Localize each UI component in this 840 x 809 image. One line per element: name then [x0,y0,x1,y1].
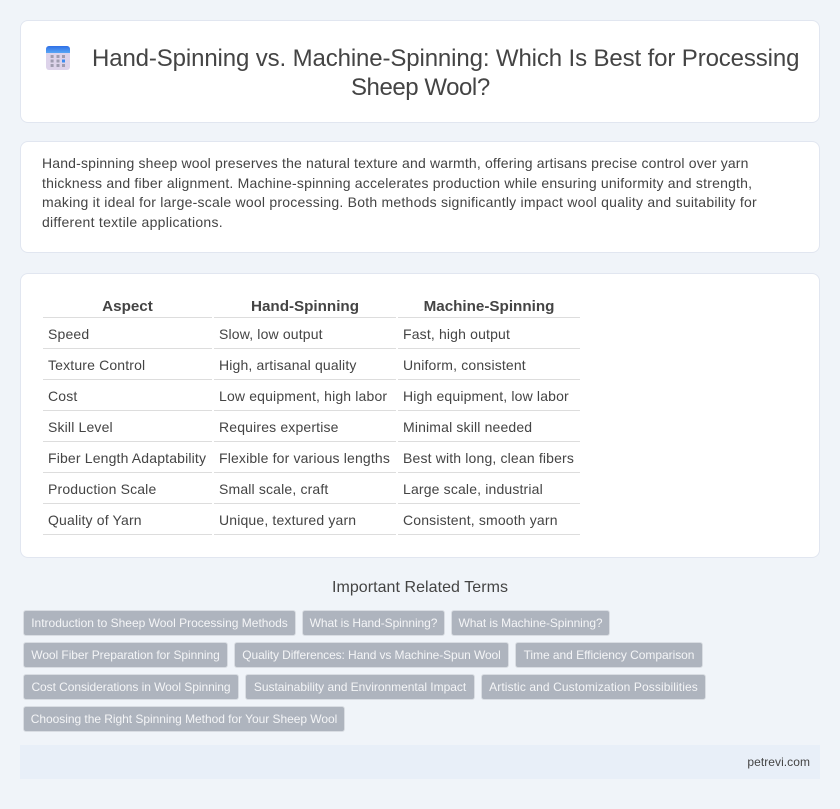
comparison table: Quality of Yarn [48,512,142,528]
tag: Time and Efficiency Comparison [524,648,694,662]
tag: What is Machine-Spinning? [458,616,603,630]
comparison table: Slow, low output [219,326,323,342]
tag [23,642,228,668]
comparison table: Fast, high output [403,326,510,342]
title [92,45,799,101]
icon: calendar grid [46,46,70,70]
tag [245,674,475,700]
tag [451,610,610,636]
tag [481,674,706,700]
tag: What is Hand-Spinning? [310,616,437,630]
comparison table: Flexible for various lengths [219,450,390,466]
tag [23,706,345,732]
comparison table [43,298,580,535]
intro text: Hand-spinning sheep wool preserves the natural texture and warmth, offering artisans precise control over yarn [42,155,749,171]
comparison table: Low equipment, high labor [219,388,387,404]
title: Sheep Wool? [351,74,490,101]
tag: Sustainability and Environmental Impact [254,680,466,694]
comparison table: High equipment, low labor [403,388,569,404]
panel: title card [20,20,820,123]
comparison table: Texture Control [48,357,145,373]
tag: Wool Fiber Preparation for Spinning [31,648,220,662]
comparison table: Cost [48,388,77,404]
comparison table: Requires expertise [219,419,339,435]
comparison table: Skill Level [48,419,113,435]
comparison table: Minimal skill needed [403,419,532,435]
tag: Introduction to Sheep Wool Processing Methods [31,616,288,630]
tag: Artistic and Customization Possibilities [489,680,698,694]
heading: related terms: Important Related Terms [332,579,508,596]
intro text: different textile applications. [42,214,223,230]
intro text [42,155,757,230]
comparison table: Consistent, smooth yarn [403,512,558,528]
comparison table: Unique, textured yarn [219,512,356,528]
tag [23,610,296,636]
footer: petrevi.com [747,755,810,769]
panel: comparison table [20,273,820,558]
tag [234,642,509,668]
comparison table: Fiber Length Adaptability [48,450,206,466]
tag: Cost Considerations in Wool Spinning [31,680,231,694]
comparison table: Uniform, consistent [403,357,526,373]
tag: Choosing the Right Spinning Method for Your Sheep Wool [31,712,337,726]
related term tags [23,610,706,732]
intro text: making it ideal for large-scale wool processing. Both methods significantly impact wool quality and suitability for [42,194,757,210]
comparison table: Best with long, clean fibers [403,450,574,466]
comparison table: High, artisanal quality [219,357,357,373]
comparison table: Large scale, industrial [403,481,543,497]
panel: introduction [20,141,820,253]
comparison table: Machine-Spinning [424,298,554,315]
comparison table: Production Scale [48,481,156,497]
tag [302,610,445,636]
tag [23,674,239,700]
tag [515,642,703,668]
intro text: thickness and fiber alignment. Machine-spinning accelerates production while ensuring uniformity and strength, [42,174,752,190]
comparison table: Aspect [102,298,153,315]
comparison table: Hand-Spinning [251,298,359,315]
comparison table: Small scale, craft [219,481,328,497]
footer [20,745,820,779]
comparison table: Speed [48,326,89,342]
title: Hand-Spinning vs. Machine-Spinning: Which Is Best for Processing [92,45,799,72]
tag: Quality Differences: Hand vs Machine-Spun Wool [242,648,501,662]
